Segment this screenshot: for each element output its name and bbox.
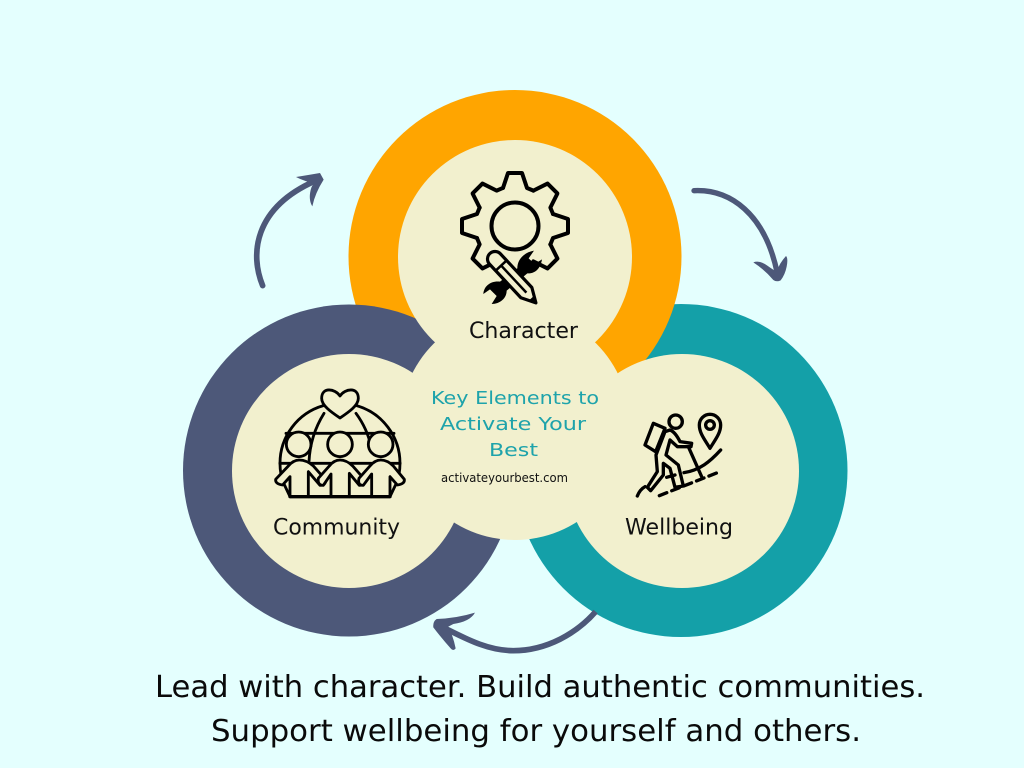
website: activateyourbest.com xyxy=(441,471,568,485)
pin xyxy=(699,414,721,448)
tagline line 2: Support wellbeing for yourself and others. xyxy=(211,714,861,749)
heart xyxy=(322,390,358,418)
trail curve xyxy=(637,450,721,496)
inner disc: community xyxy=(232,354,466,588)
label: Character: Character xyxy=(469,319,579,344)
label: Community: Community xyxy=(273,516,400,540)
arrow: wellbeing to community xyxy=(433,612,596,651)
globe xyxy=(280,406,400,497)
heading line 2: Activate Your xyxy=(440,414,587,435)
icon: community globe with people and heart xyxy=(276,390,404,497)
inner disc: wellbeing xyxy=(565,354,799,588)
ring: community (navy) xyxy=(183,304,515,636)
ring: wellbeing (teal) xyxy=(514,304,848,637)
tagline line 1: Lead with character. Build authentic communities. xyxy=(155,670,925,705)
pencil xyxy=(484,248,541,308)
icon: hiker with location pin xyxy=(637,414,721,496)
heading line 3: Best xyxy=(489,440,538,461)
arrow: character to wellbeing xyxy=(694,191,787,281)
panel: overlapping rings xyxy=(183,90,848,637)
ring: character (orange) xyxy=(348,90,682,423)
centre heading xyxy=(431,388,599,461)
inner disc: centre xyxy=(400,310,630,540)
pin dot xyxy=(706,421,714,429)
body xyxy=(647,430,692,491)
trekking pole xyxy=(688,447,702,477)
backpack xyxy=(645,423,665,452)
heading line 1: Key Elements to xyxy=(431,388,599,409)
people xyxy=(276,432,404,497)
tagline xyxy=(155,670,925,749)
head xyxy=(669,415,682,428)
dashed path xyxy=(659,472,718,496)
wrench xyxy=(483,251,542,304)
label: Wellbeing: Wellbeing xyxy=(625,516,733,540)
arrow: community to character xyxy=(257,173,324,286)
inner disc: character xyxy=(398,140,632,374)
gear outline xyxy=(462,173,568,272)
icon: gear with pencil and wrench xyxy=(462,173,568,308)
